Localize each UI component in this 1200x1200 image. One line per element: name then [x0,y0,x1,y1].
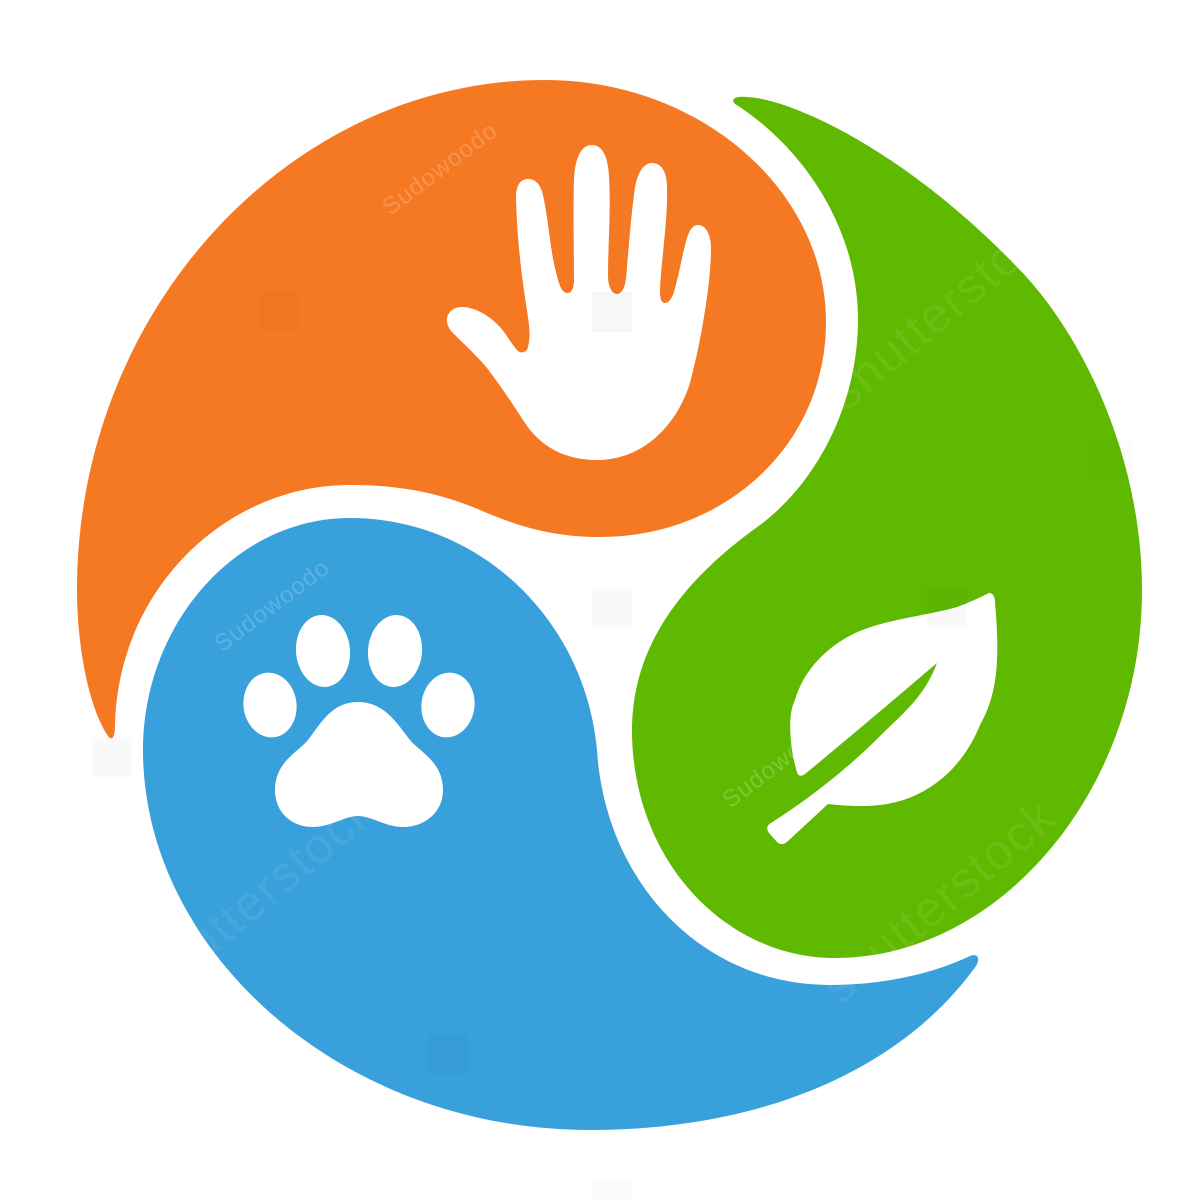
panel: orange swirl with hand [77,80,826,738]
watermark text [131,117,1072,1014]
watermark text: shutterstock [817,194,1072,420]
toe pads [239,613,479,741]
watermark squares [92,291,1133,1200]
watermark text: Sudowoodo [717,710,842,814]
watermark text: Sudowoodo [209,554,334,658]
watermark text: shutterstock [811,788,1066,1014]
watermark text: Sudowoodo [377,117,502,221]
icon: leaf [767,593,997,844]
panel: blue swirl with paw [143,518,978,1130]
panel: green swirl with leaf [632,97,1142,958]
icon: hand [447,145,711,460]
watermark text: shutterstock [131,782,386,1008]
icon: paw [239,613,479,827]
main pad [275,702,443,827]
